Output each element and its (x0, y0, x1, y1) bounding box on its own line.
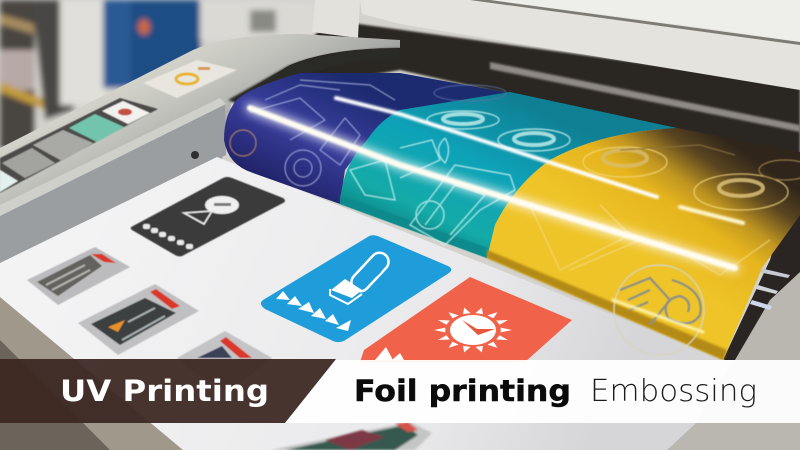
paper sheet (0, 157, 730, 450)
light banner tab (285, 360, 800, 423)
black label panel (131, 177, 285, 256)
roller teal foil band (340, 92, 677, 258)
sample card 1 (27, 247, 130, 305)
top cover (312, 0, 800, 90)
roller (224, 73, 800, 360)
dark gap behind cover (230, 20, 800, 170)
blue label panel (261, 235, 451, 342)
hood underside shadow (228, 48, 400, 105)
metal rail (490, 62, 800, 132)
black panel icon (184, 196, 239, 224)
roller dark end (723, 155, 800, 360)
label: Embossing: Embossing (590, 374, 757, 409)
teal band engraved patterns (350, 111, 570, 245)
sun clock icon (434, 308, 512, 352)
gold lower edge (487, 250, 727, 360)
gold band engraved patterns (530, 145, 800, 275)
red panel triangles (375, 347, 404, 360)
gold emblem (614, 265, 704, 355)
sample card 2 (78, 284, 199, 355)
blue band engraved patterns (230, 80, 506, 186)
label: Foil printing: Foil printing (354, 374, 571, 408)
label: UV Printing: UV Printing (60, 374, 269, 408)
wood table edge (0, 262, 220, 450)
roller blue foil band (224, 73, 510, 204)
right machine housing (660, 268, 800, 450)
black panel marker row (143, 224, 193, 249)
blue panel capsule icon (330, 249, 392, 304)
title banner (0, 359, 800, 423)
red label panel (360, 277, 572, 362)
control buttons (0, 98, 158, 193)
machine body with curved hood (0, 34, 400, 265)
teal lower edge (340, 195, 488, 258)
lower grey edge strip (0, 103, 226, 265)
roller gold foil band (487, 128, 800, 360)
blue panel triangle row (276, 291, 351, 331)
sticker label (143, 60, 237, 98)
specular highlight streaks (250, 98, 743, 332)
sample card 4 (270, 422, 432, 450)
dark banner tab (0, 359, 336, 423)
sample card 3 (177, 331, 272, 392)
